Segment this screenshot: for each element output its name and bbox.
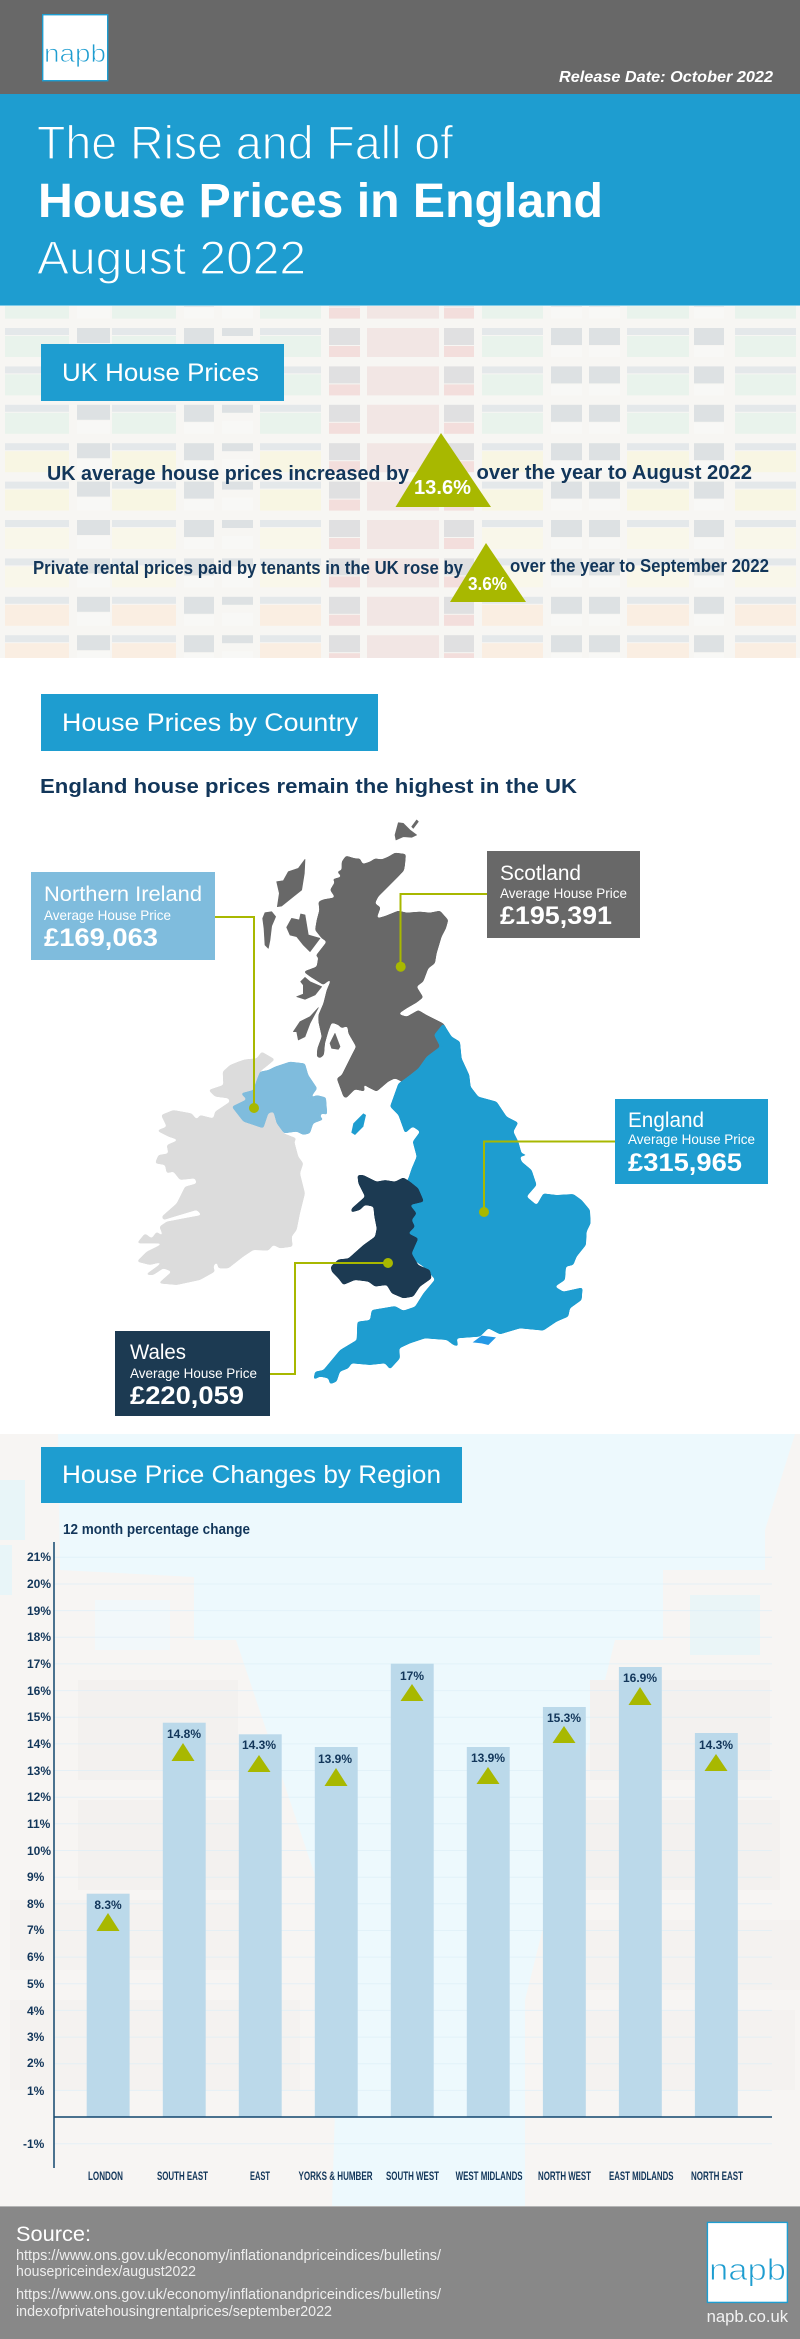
y axis labels: 15% — [27, 1710, 51, 1724]
heading: House Prices by Country — [41, 694, 378, 751]
x axis labels: SOUTH EAST — [157, 2169, 208, 2183]
y axis labels: 16% — [27, 1684, 51, 1698]
background: buildings — [0, 1434, 800, 2206]
y axis labels: 19% — [27, 1604, 51, 1618]
y axis labels: 3% — [27, 2030, 45, 2044]
y axis labels: 8% — [27, 1897, 45, 1911]
callout: Scotland: Scotland — [500, 862, 581, 885]
callout: Wales — [115, 1258, 393, 1416]
title banner — [0, 94, 800, 306]
callout: Northern Ireland: Northern Ireland — [44, 883, 202, 906]
map: Isle of Man — [351, 1113, 366, 1135]
heading: UK House Prices — [41, 344, 284, 401]
y axis labels: 12% — [27, 1790, 51, 1804]
map: Scotland — [263, 820, 448, 1098]
callout: Northern Ireland: £169,063 — [44, 924, 158, 952]
y axis labels: 20% — [27, 1577, 51, 1591]
y axis labels: 11% — [27, 1817, 51, 1831]
x axis labels — [88, 2169, 743, 2183]
triangle up 13.6% — [396, 433, 491, 507]
bar: South West 17%: 17% — [400, 1669, 424, 1683]
y axis labels: 9% — [27, 1870, 45, 1884]
map: Wales — [331, 1175, 432, 1298]
chart caption: 12 month percentage change — [63, 1522, 250, 1538]
y axis labels: 5% — [27, 1977, 45, 1991]
x axis labels: NORTH EAST — [691, 2169, 743, 2183]
y axis labels: 7% — [27, 1923, 45, 1937]
bar: North East 14.3% — [695, 1733, 738, 2117]
y axis labels: 2% — [27, 2056, 45, 2070]
release date: Release Date: October 2022 — [559, 69, 773, 86]
y axis labels: 1% — [27, 2084, 45, 2098]
callout: England: England — [628, 1109, 704, 1132]
footer: sources — [0, 2206, 800, 2339]
y axis labels: 13% — [27, 1764, 51, 1778]
source link 1: https://www.ons.gov.uk/economy/inflationandpriceindices/bulletins/ — [16, 2247, 442, 2264]
source link 1 — [16, 2247, 442, 2280]
logo: napb footer: napb — [709, 2252, 786, 2287]
map: Isle of Wight — [473, 1336, 496, 1345]
stat: house prices 13.6%: UK average house prices increased by — [47, 463, 410, 485]
heading: House Price Changes by Region — [41, 1447, 462, 1503]
bar: West Midlands 13.9% — [467, 1747, 510, 2117]
logo: napb — [43, 15, 108, 81]
stat: house prices 13.6% — [47, 433, 752, 507]
bar: East 14.3% — [239, 1734, 282, 2117]
map: Northern Ireland — [232, 1062, 327, 1135]
title line 1: The Rise and Fall of — [37, 116, 454, 169]
x axis labels: SOUTH WEST — [386, 2169, 439, 2183]
y axis labels: 17% — [27, 1657, 51, 1671]
map: Republic of Ireland — [137, 1052, 305, 1285]
bar: East Midlands 16.9% — [619, 1667, 662, 2117]
stat: rental prices 3.6% — [33, 543, 769, 602]
bar: Yorks & Humber 13.9% — [315, 1747, 358, 2117]
y axis labels: 14% — [27, 1737, 51, 1751]
y axis labels: 4% — [27, 2004, 45, 2018]
stat: rental prices 3.6%: 3.6% — [468, 574, 507, 594]
y axis labels — [23, 1550, 51, 2151]
bar: Yorks & Humber 13.9%: 13.9% — [318, 1752, 352, 1766]
y axis labels: 6% — [27, 1950, 45, 1964]
callout: Northern Ireland: Average House Price — [44, 907, 171, 923]
callout: Scotland — [396, 851, 640, 972]
logo: napb footer — [707, 2222, 787, 2302]
title line 2: House Prices in England — [38, 175, 603, 228]
stat: rental prices 3.6%: Private rental prices paid by tenants in the UK rose by — [33, 558, 463, 578]
stat: rental prices 3.6%: over the year to September 2022 — [510, 556, 769, 576]
source heading: Source: — [16, 2223, 91, 2246]
logo: napb: napb — [44, 40, 106, 68]
map: England — [313, 1023, 591, 1384]
source link 2 — [16, 2286, 442, 2320]
bar: South East 14.8% — [163, 1723, 206, 2117]
x axis labels: LONDON — [88, 2169, 123, 2183]
panel: house price changes by region — [0, 1434, 800, 2206]
stat: house prices 13.6%: over the year to August 2022 — [476, 462, 752, 484]
bar: London 8.3%: 8.3% — [94, 1898, 122, 1912]
bar: West Midlands 13.9%: 13.9% — [471, 1751, 505, 1765]
callout: England — [479, 1099, 768, 1217]
chart axes — [54, 1542, 772, 2168]
callout: England: £315,965 — [628, 1149, 742, 1177]
title line 3: August 2022 — [37, 231, 306, 284]
bar: London 8.3% — [87, 1894, 130, 2117]
x axis labels: NORTH WEST — [538, 2169, 591, 2183]
bar chart — [23, 1542, 772, 2183]
callout: Scotland: Average House Price — [500, 885, 627, 901]
bar: East 14.3%: 14.3% — [242, 1738, 276, 1752]
header bar — [0, 0, 800, 94]
source link 2: https://www.ons.gov.uk/economy/inflationandpriceindices/bulletins/ — [16, 2286, 442, 2303]
background: apartment facade — [0, 290, 800, 664]
x axis labels: EAST — [250, 2169, 270, 2183]
bar: East Midlands 16.9%: 16.9% — [623, 1671, 657, 1685]
y axis labels: -1% — [23, 2137, 45, 2151]
bar: South East 14.8%: 14.8% — [167, 1727, 201, 1741]
bar: North West 15.3% — [543, 1707, 586, 2117]
map of UK and Ireland — [137, 820, 591, 1384]
x axis labels: WEST MIDLANDS — [456, 2169, 523, 2183]
callout: Scotland: £195,391 — [500, 902, 612, 930]
source link 1: housepriceindex/august2022 — [16, 2263, 196, 2280]
heading: House Prices by Country: House Prices by Country — [62, 709, 359, 737]
y axis labels: 10% — [27, 1844, 51, 1858]
stat: house prices 13.6%: 13.6% — [414, 477, 471, 499]
y axis labels: 21% — [27, 1550, 51, 1564]
website: napb.co.uk — [707, 2307, 789, 2326]
callout: Wales: £220,059 — [130, 1382, 244, 1410]
callout: Wales: Average House Price — [130, 1365, 257, 1381]
callout: Northern Ireland — [31, 872, 259, 1113]
x axis labels: EAST MIDLANDS — [609, 2169, 674, 2183]
heading: House Price Changes by Region: House Price Changes by Region — [62, 1461, 441, 1489]
x axis labels: YORKS & HUMBER — [298, 2169, 373, 2183]
bar: North East 14.3%: 14.3% — [699, 1738, 733, 1752]
y axis labels: 18% — [27, 1630, 51, 1644]
triangle up 3.6% — [450, 543, 526, 602]
callout: England: Average House Price — [628, 1131, 755, 1147]
panel: UK house prices — [0, 290, 800, 664]
source link 2: indexofprivatehousingrentalprices/september2022 — [16, 2303, 332, 2320]
callout: Wales: Wales — [130, 1341, 186, 1364]
bar: South West 17% — [391, 1664, 434, 2117]
bar: North West 15.3%: 15.3% — [547, 1711, 581, 1725]
subheading: England highest: England house prices remain the highest in the UK — [40, 775, 577, 798]
heading: UK House Prices: UK House Prices — [62, 359, 259, 387]
